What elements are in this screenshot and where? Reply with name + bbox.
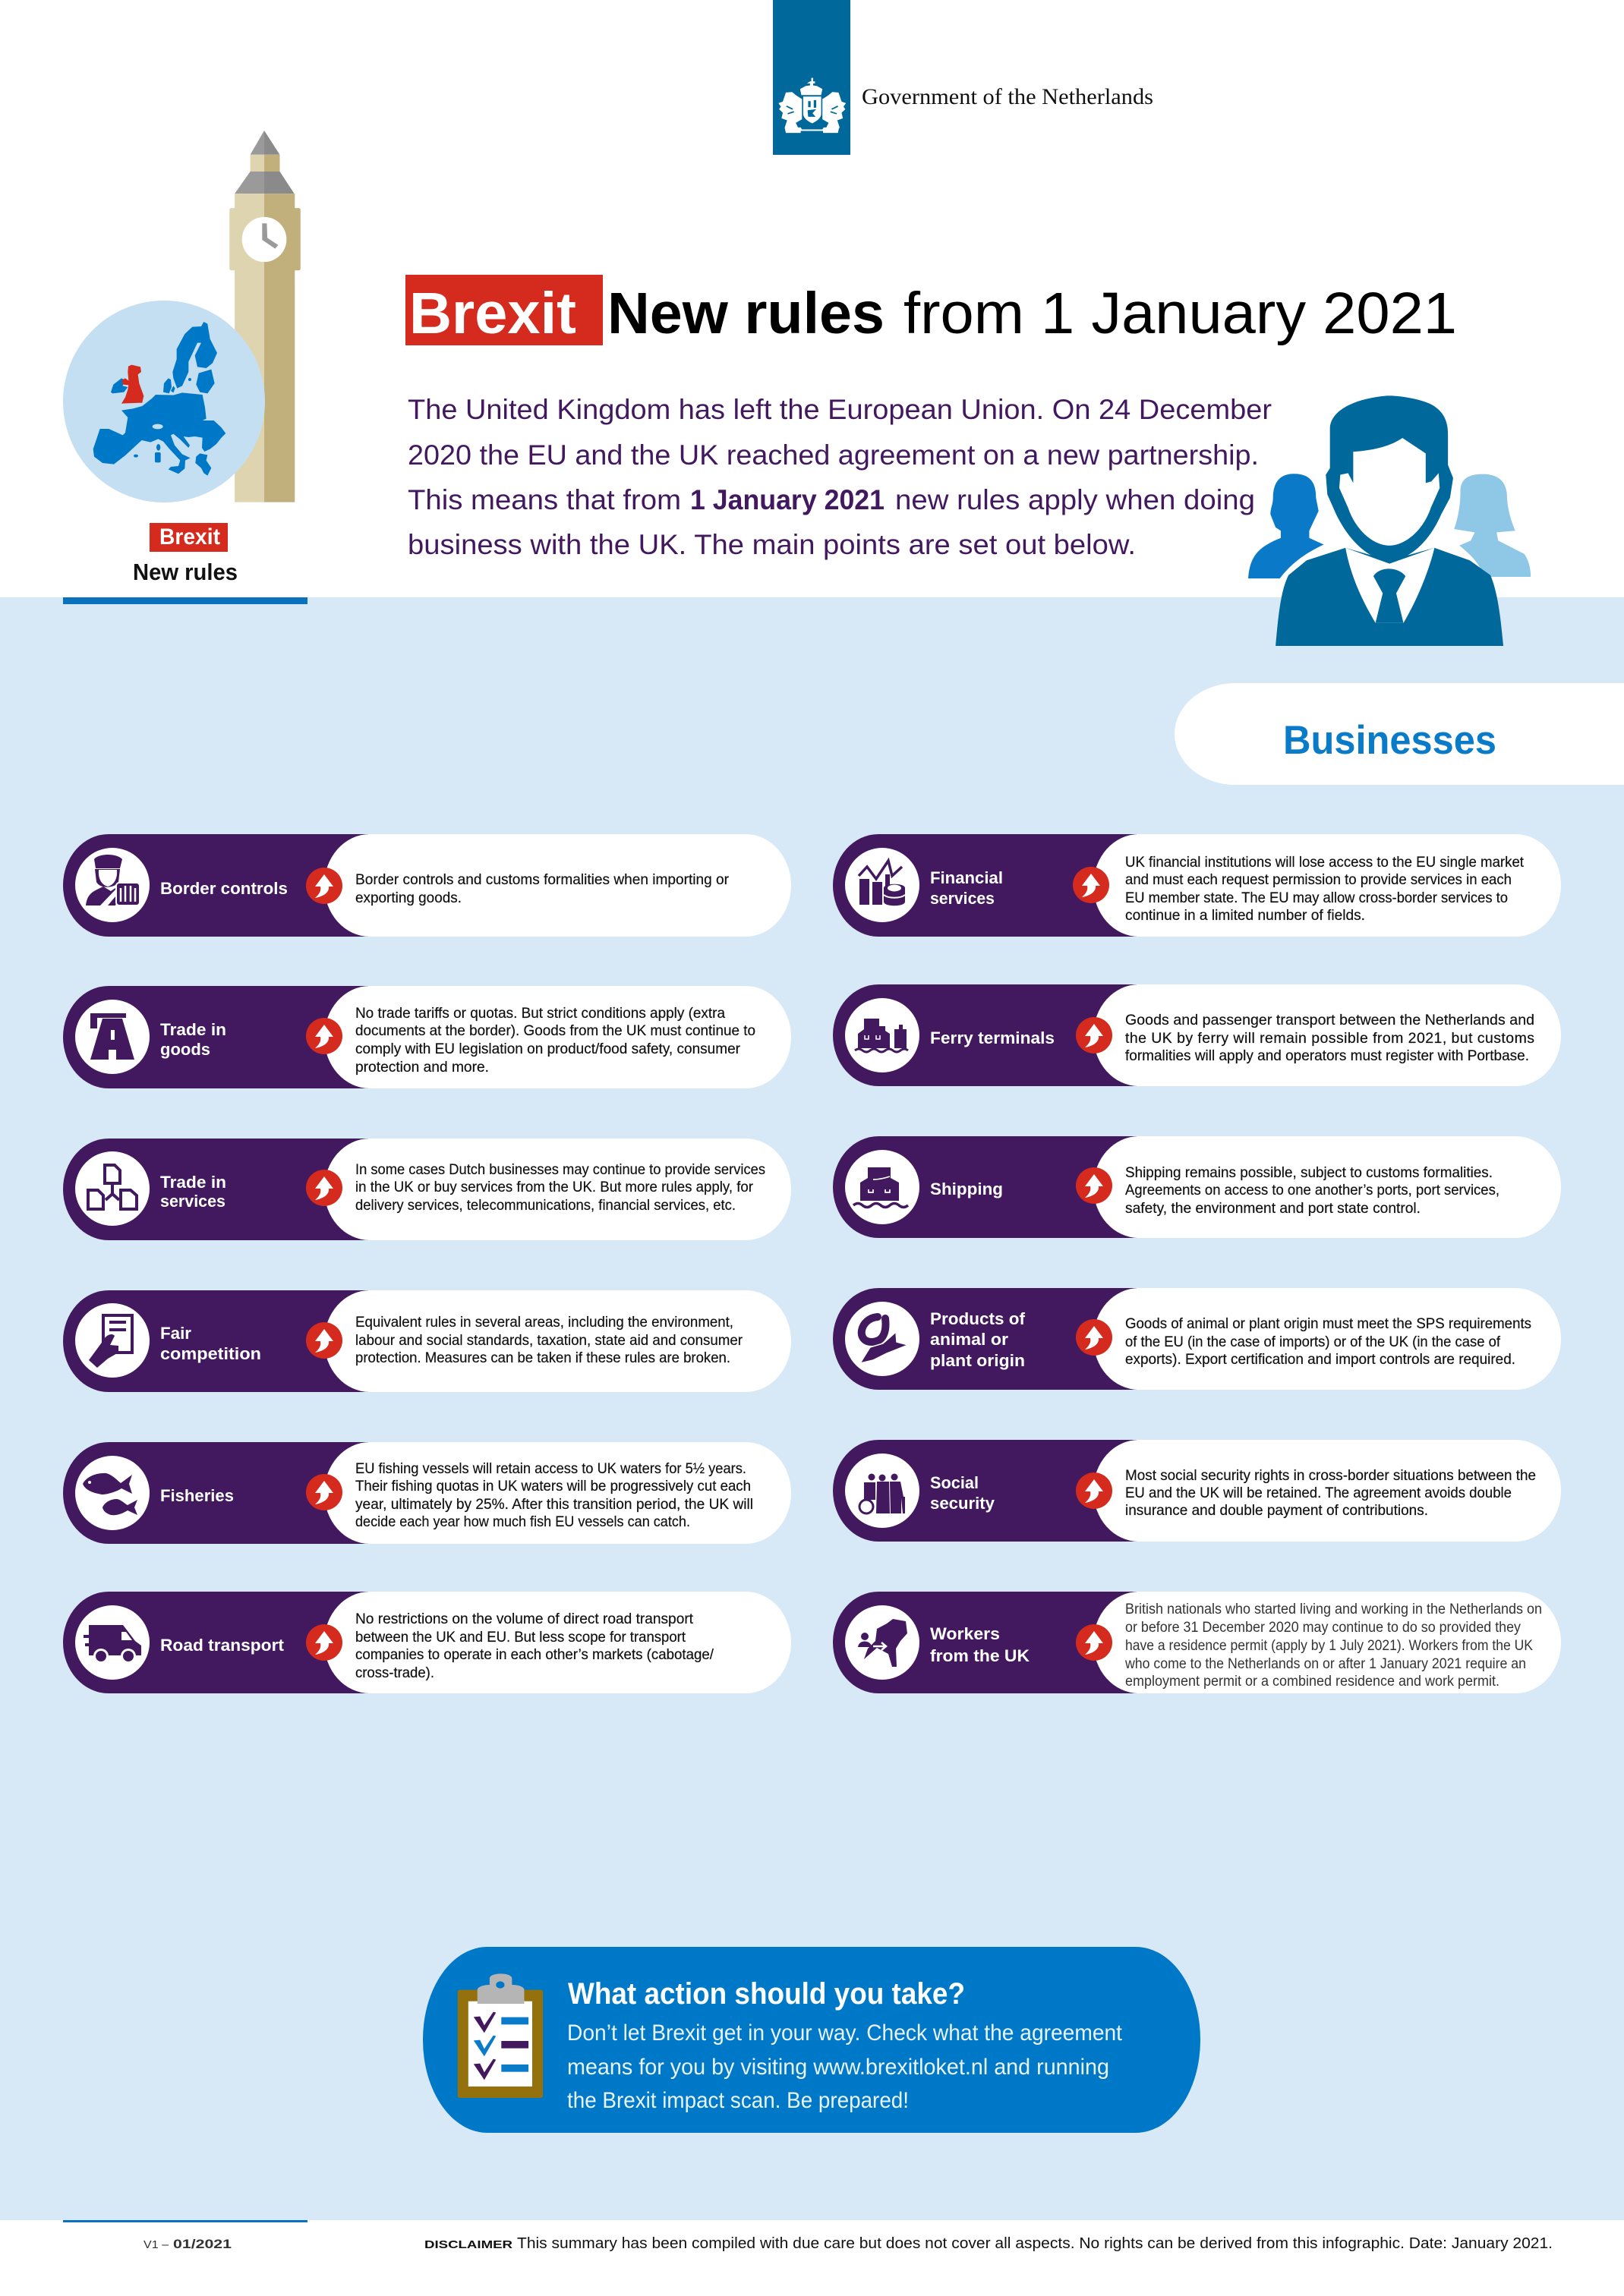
title: from 1 January 2021 xyxy=(903,281,1457,346)
description: documents at the border). Goods from the UK must continue to xyxy=(355,1022,755,1039)
label: Border controls xyxy=(160,879,288,898)
text pill xyxy=(324,986,791,1088)
icon: Europe map xyxy=(63,301,265,502)
description: formalities will apply and operators must register with Portbase. xyxy=(1125,1047,1529,1064)
text pill xyxy=(324,1290,791,1392)
callout: What action should you take? xyxy=(423,1947,1200,2133)
panel: Workers from the UK xyxy=(833,1592,1561,1693)
label: services xyxy=(160,1192,225,1211)
label: plant origin xyxy=(930,1351,1025,1370)
description: EU and the UK will be retained. The agreement avoids double xyxy=(1125,1485,1512,1501)
description: labour and social standards, taxation, state aid and consumer xyxy=(355,1332,743,1349)
arrow xyxy=(306,1018,342,1054)
footer: version: V1 – xyxy=(143,2238,169,2251)
label xyxy=(930,1624,1030,1665)
title: Brexit xyxy=(409,281,576,346)
description xyxy=(1125,854,1525,924)
panel: Social security xyxy=(833,1440,1561,1542)
description: protection. Measures can be taken if these rules are broken. xyxy=(355,1350,730,1366)
icon: Big Ben tower xyxy=(229,131,301,502)
arrow xyxy=(1076,1167,1112,1204)
small label: New rules: New rules xyxy=(133,559,238,585)
label xyxy=(160,1173,226,1211)
panel: Road transport xyxy=(63,1592,791,1693)
label: Products of xyxy=(930,1309,1026,1328)
description: Border controls and customs formalities when importing or xyxy=(355,871,729,888)
description xyxy=(1124,1602,1542,1690)
label xyxy=(930,1309,1026,1370)
callout text: the Brexit impact scan. Be prepared! xyxy=(567,2088,909,2113)
footer: version xyxy=(143,2237,232,2251)
text pill xyxy=(1093,1288,1561,1390)
intro text: 1 January 2021 xyxy=(690,484,885,515)
header accent bar xyxy=(63,597,307,604)
description: British nationals who started living and working in the Netherlands on xyxy=(1125,1602,1542,1617)
text pill xyxy=(1093,1592,1561,1693)
small label: Brexit: Brexit xyxy=(159,524,220,550)
label: competition xyxy=(160,1344,261,1363)
label: goods xyxy=(160,1040,210,1059)
arrow xyxy=(1076,1472,1112,1509)
label: Social xyxy=(930,1473,979,1492)
icon: clipboard checklist xyxy=(458,1973,543,2098)
label: animal or xyxy=(930,1330,1008,1349)
text pill xyxy=(324,834,791,937)
icon: van xyxy=(75,1605,150,1680)
panel: Shipping xyxy=(833,1136,1561,1238)
label xyxy=(160,1324,261,1363)
arrow xyxy=(1076,1017,1112,1054)
description: decide each year how much fish EU vessels can catch. xyxy=(355,1513,690,1530)
text pill xyxy=(1093,834,1561,937)
description: Goods and passenger transport between the Netherlands and xyxy=(1125,1012,1534,1028)
icon: ferry xyxy=(845,998,919,1072)
title xyxy=(405,275,1457,346)
description: continue in a limited number of fields. xyxy=(1125,907,1365,924)
callout text xyxy=(567,2020,1123,2113)
description: who come to the Netherlands on or after 1 January 2021 require an xyxy=(1124,1656,1526,1672)
text pill xyxy=(324,1139,791,1240)
arrow xyxy=(1076,1624,1112,1661)
description: employment permit or a combined residence and work permit. xyxy=(1125,1674,1499,1690)
label xyxy=(930,1473,995,1513)
label: Workers xyxy=(930,1624,1000,1643)
description: and must each request permission to provide services in each xyxy=(1125,871,1512,888)
description: No trade tariffs or quotas. But strict conditions apply (extra xyxy=(355,1005,725,1022)
description: exporting goods. xyxy=(355,890,462,906)
description xyxy=(355,1611,714,1681)
description: protection and more. xyxy=(355,1059,489,1076)
description: the UK by ferry will remain possible from 2021, but customs xyxy=(1125,1030,1534,1047)
description: or before 31 December 2020 may continue to do so provided they xyxy=(1125,1620,1521,1636)
footer: disclaimer: This summary has been compiled with due care but does not cover all aspects. No rights can be derived from this infographic. Date: January 2021. xyxy=(517,2235,1553,2252)
description xyxy=(355,1314,743,1366)
description: safety, the environment and port state control. xyxy=(1125,1200,1421,1217)
icon: sausage and carrot xyxy=(845,1302,919,1376)
description: companies to operate in each other’s markets (cabotage/ xyxy=(355,1646,714,1663)
description xyxy=(1125,1315,1531,1368)
icon: people and wheelchair xyxy=(845,1454,919,1528)
description: Equivalent rules in several areas, including the environment, xyxy=(355,1314,733,1331)
description: Agreements on access to one another’s ports, port services, xyxy=(1125,1182,1499,1198)
intro text: new rules apply when doing xyxy=(895,484,1255,515)
logo: Government of the Netherlands xyxy=(773,0,1153,155)
description: have a residence permit (apply by 1 July 2021). Workers from the UK xyxy=(1125,1638,1533,1654)
panel: Fisheries xyxy=(63,1442,791,1544)
description: cross-trade). xyxy=(355,1665,434,1681)
icon: road with barrier xyxy=(75,1000,150,1074)
description: year, ultimately by 25%. After this transition period, the UK will xyxy=(355,1496,753,1513)
title: New rules xyxy=(607,281,885,346)
heading pill: Businesses: Businesses xyxy=(1283,718,1496,763)
intro text: 2020 the EU and the UK reached agreement on a new partnership. xyxy=(408,439,1259,471)
arrow xyxy=(306,868,342,904)
label: Financial xyxy=(930,868,1003,887)
arrow xyxy=(306,1322,342,1359)
icon: fish xyxy=(75,1456,150,1530)
description xyxy=(355,1460,753,1530)
intro text: business with the UK. The main points are set out below. xyxy=(408,529,1136,560)
description: insurance and double payment of contributions. xyxy=(1125,1502,1428,1519)
arrow xyxy=(306,1624,342,1661)
label xyxy=(160,1020,226,1059)
description: between the UK and EU. But less scope for transport xyxy=(355,1629,686,1646)
description xyxy=(1125,1164,1499,1217)
panel: Financial services xyxy=(833,834,1561,937)
description: Goods of animal or plant origin must meet the SPS requirements xyxy=(1125,1315,1531,1332)
icon: chart and coins xyxy=(845,848,919,922)
icon: customs officer xyxy=(75,848,150,922)
callout heading: What action should you take? xyxy=(568,1977,965,2011)
icon: business people xyxy=(1248,395,1531,646)
illustration: Big Ben with Europe map xyxy=(63,131,301,502)
description: UK financial institutions will lose access to the EU single market xyxy=(1125,854,1525,871)
label: Road transport xyxy=(160,1636,285,1655)
description: Their fishing quotas in UK waters will be progressively cut each xyxy=(355,1478,751,1494)
logo wordmark: Government of the Netherlands xyxy=(862,84,1153,109)
arrow xyxy=(1073,867,1109,903)
description: No restrictions on the volume of direct road transport xyxy=(355,1611,694,1627)
description: delivery services, telecommunications, financial services, etc. xyxy=(355,1197,736,1214)
text pill xyxy=(1093,1440,1561,1542)
icon: hand holding document xyxy=(75,1303,150,1378)
callout text: Don’t let Brexit get in your way. Check what the agreement xyxy=(567,2020,1123,2046)
label: Trade in xyxy=(160,1173,226,1192)
footer: disclaimer: DISCLAIMER xyxy=(424,2238,512,2251)
label: Fisheries xyxy=(160,1486,234,1505)
label: from the UK xyxy=(930,1646,1030,1665)
description: comply with EU legislation on product/food safety, consumer xyxy=(355,1041,740,1057)
label xyxy=(930,868,1003,908)
panel: Border controls xyxy=(63,834,791,937)
description: EU fishing vessels will retain access to UK waters for 5½ years. xyxy=(355,1460,746,1477)
description: Shipping remains possible, subject to customs formalities. xyxy=(1125,1164,1493,1181)
footer: version: 01/2021 xyxy=(173,2237,232,2251)
icon: linked documents xyxy=(75,1151,150,1226)
description: exports). Export certification and import controls are required. xyxy=(1125,1351,1515,1368)
arrow xyxy=(306,1170,342,1206)
panel: Trade in services xyxy=(63,1139,791,1240)
description: Most social security rights in cross-border situations between the xyxy=(1125,1467,1536,1484)
description xyxy=(355,871,729,906)
text pill xyxy=(324,1592,791,1693)
icon: coat of arms xyxy=(778,78,846,133)
panel: Trade in goods xyxy=(63,986,791,1088)
label: services xyxy=(930,889,995,908)
panel: Fair competition xyxy=(63,1290,791,1392)
description xyxy=(1125,1012,1534,1064)
icon: ship xyxy=(845,1150,919,1224)
label: Ferry terminals xyxy=(930,1028,1055,1047)
label: Trade in xyxy=(160,1020,226,1039)
description xyxy=(1125,1467,1536,1519)
arrow xyxy=(1076,1319,1112,1356)
text pill xyxy=(1093,984,1561,1086)
heading pill: Businesses xyxy=(1175,683,1624,785)
description: EU member state. The EU may allow cross-border services to xyxy=(1125,890,1508,906)
label: security xyxy=(930,1494,995,1513)
panel: Products of animal or plant origin xyxy=(833,1288,1561,1390)
text pill xyxy=(324,1442,791,1544)
description xyxy=(355,1005,755,1076)
footer accent bar xyxy=(63,2220,307,2222)
label: Fair xyxy=(160,1324,191,1343)
light blue page background xyxy=(0,597,1624,2220)
description: of the EU (in the case of imports) or of the UK (in the case of xyxy=(1125,1334,1501,1350)
intro text: This means that from xyxy=(408,484,681,515)
intro text xyxy=(408,394,1272,560)
description: In some cases Dutch businesses may continue to provide services xyxy=(355,1161,765,1178)
description: in the UK or buy services from the UK. But more rules apply, for xyxy=(355,1179,753,1195)
panel: Ferry terminals xyxy=(833,984,1561,1086)
intro text: The United Kingdom has left the European Union. On 24 December xyxy=(408,394,1272,425)
text pill xyxy=(1093,1136,1561,1238)
label: Shipping xyxy=(930,1179,1003,1198)
description xyxy=(355,1161,765,1214)
arrow xyxy=(306,1474,342,1510)
callout text: means for you by visiting www.brexitloket.nl and running xyxy=(567,2055,1109,2080)
icon: Netherlands map and worker xyxy=(845,1605,919,1680)
